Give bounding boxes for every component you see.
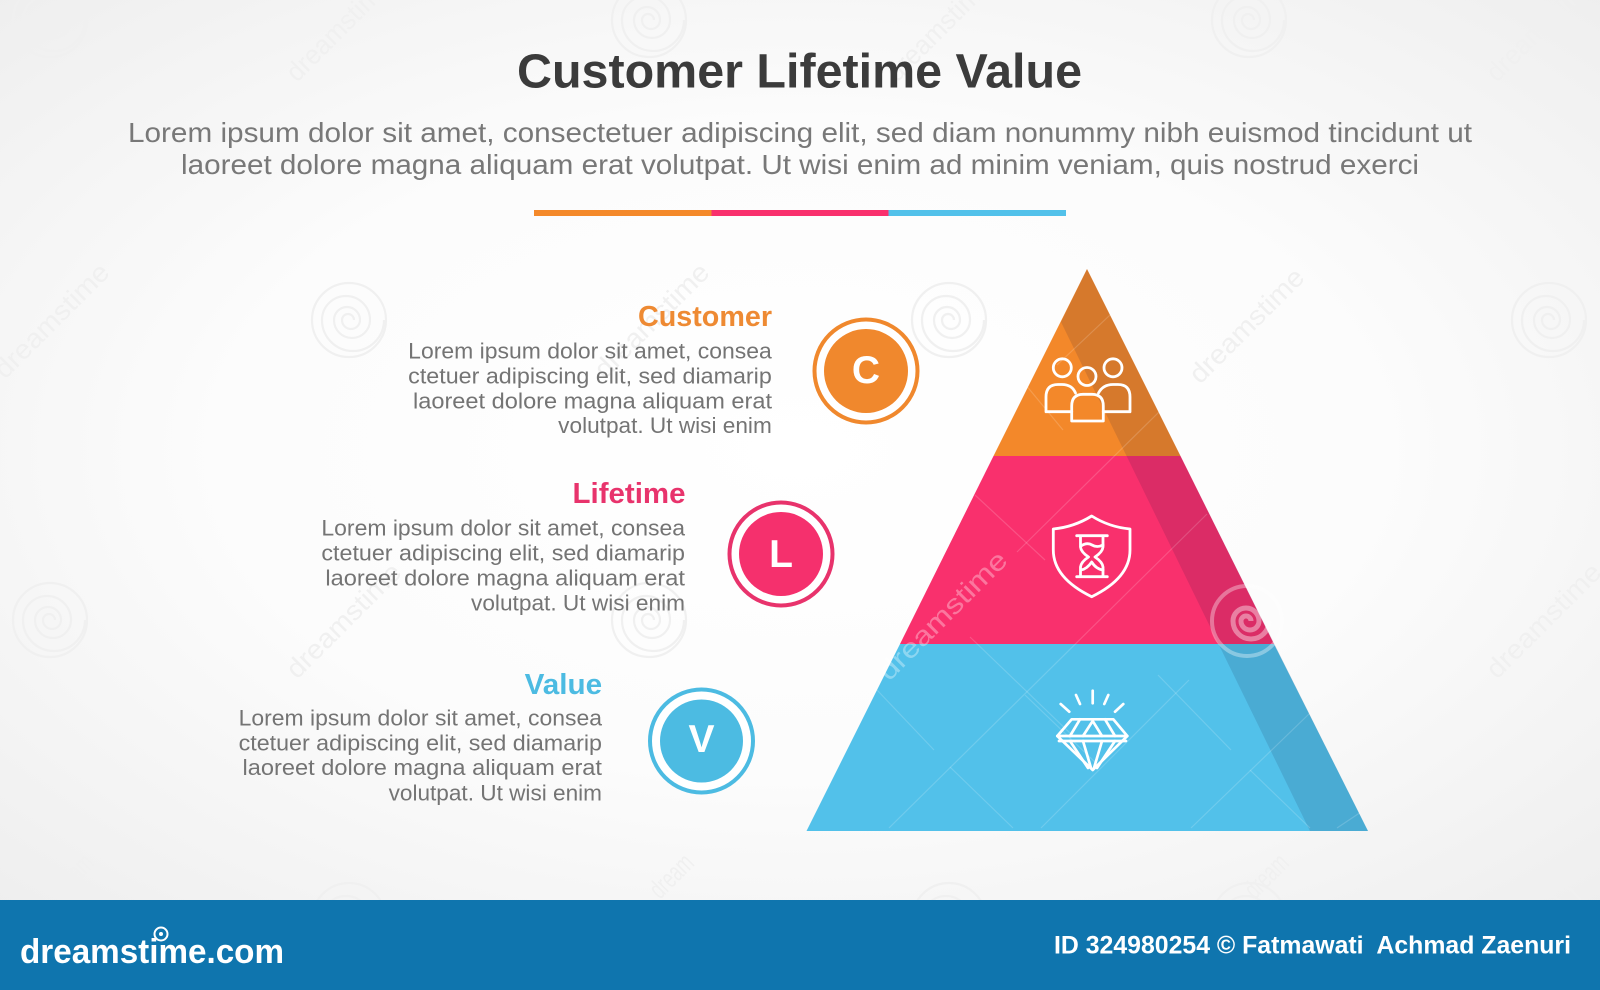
badge: V [650,690,753,792]
footer logo: dreamstime.com [20,933,284,971]
badge: C [814,320,918,422]
panel: lifetime [321,478,832,616]
text block: lifetime: ctetuer adipiscing elit, sed diamarip [321,541,685,566]
text: dreamstime [1480,557,1600,684]
text block: value: laoreet dolore magna aliquam erat [242,755,603,780]
heading: value: Value [525,669,602,701]
badge: V: V [688,718,715,761]
text block: value: ctetuer adipiscing elit, sed diamarip [239,731,602,756]
text block: customer: laoreet dolore magna aliquam erat [413,388,773,413]
text block: lifetime: Lorem ipsum dolor sit amet, consea [321,516,685,540]
heading: lifetime: Lifetime [572,478,686,510]
text block: customer [408,338,773,438]
pyramid chart [806,269,1368,831]
subtitle text: laoreet dolore magna aliquam erat volutpat. Ut wisi enim ad minim veniam, quis nostrud exerci [181,149,1419,180]
badge: L: L [769,533,793,576]
subtitle text [128,117,1472,180]
icon: people [1046,359,1130,421]
text block: lifetime: volutpat. Ut wisi enim [471,591,685,616]
text: dreamstime [280,557,407,684]
footer credit: ID 324980254 © Fatmawati Achmad Zaenuri [1054,932,1571,960]
badge: C: C [852,349,880,392]
text block: lifetime: laoreet dolore magna aliquam erat [325,565,686,590]
pyramid tier: value [806,644,1368,831]
text block: value: volutpat. Ut wisi enim [389,780,602,805]
text: dream [43,848,100,904]
text: dream [1238,848,1295,904]
text block: customer: Lorem ipsum dolor sit amet, consea [408,338,772,364]
title: Customer Lifetime Value [517,46,1082,98]
panel: customer [408,301,918,438]
icon: shield with hourglass [1053,516,1130,597]
text: dreamstime [588,257,715,384]
text: dream [643,848,700,904]
footer bar [0,900,1600,990]
text block: value [239,706,603,805]
subtitle text: Lorem ipsum dolor sit amet, consectetuer adipiscing elit, sed diam nonummy nibh euismod tincidunt ut [128,117,1472,148]
text block: value: Lorem ipsum dolor sit amet, consea [239,706,602,731]
panel: value [239,669,753,805]
text: dreamstime [1183,262,1310,389]
pyramid side shade [1061,269,1368,831]
text block: customer: ctetuer adipiscing elit, sed diamarip [408,363,772,388]
pyramid chart: dreamstime [872,545,1013,686]
tri-colour divider [534,210,1066,216]
text block: lifetime [321,516,686,616]
text block: customer: volutpat. Ut wisi enim [558,413,772,438]
pyramid tier: customer [994,269,1180,456]
pyramid tier: lifetime [900,456,1274,644]
badge: L [730,502,832,606]
icon: diamond [1057,691,1127,770]
heading: customer: Customer [638,301,772,333]
